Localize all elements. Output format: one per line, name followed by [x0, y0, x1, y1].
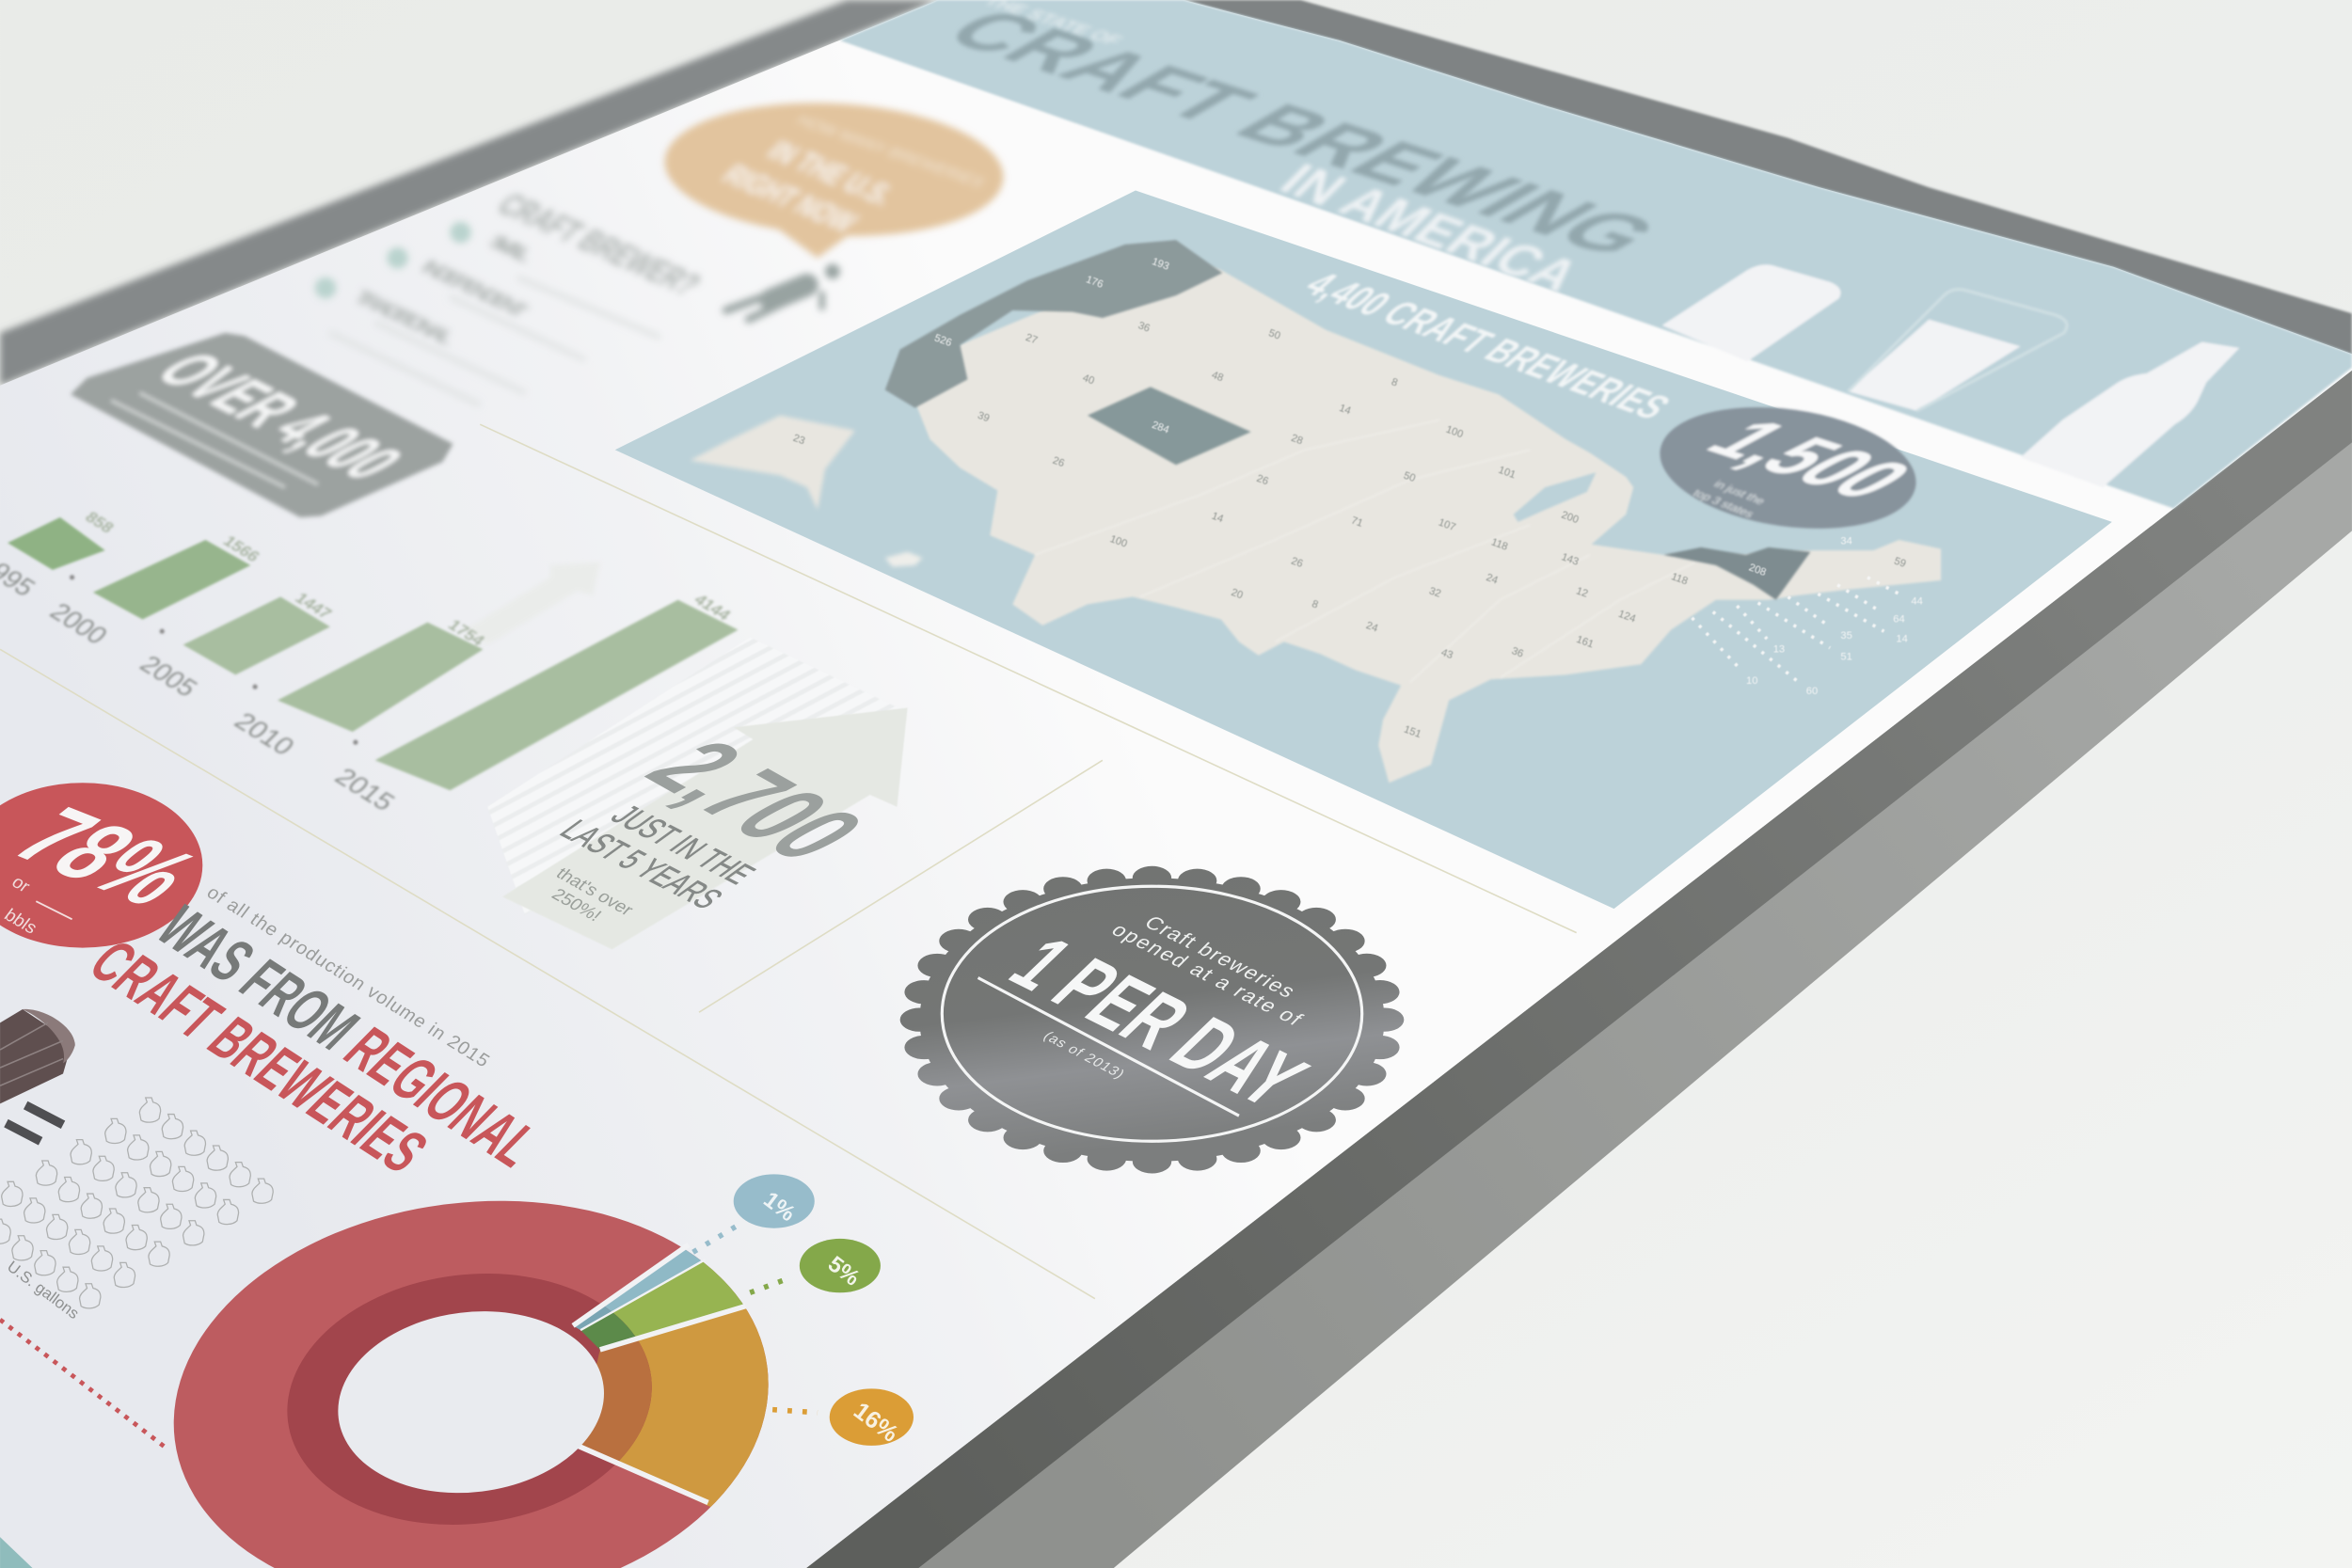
map labels: state brewery counts: 100	[1108, 533, 1129, 550]
callouts: northeast dotted leader lines: 60	[1806, 686, 1818, 697]
callouts: northeast dotted leader lines: 64	[1893, 614, 1905, 626]
callout: 1 percent: 1%	[758, 1187, 800, 1227]
map labels: state brewery counts: 26	[1051, 455, 1066, 469]
map labels: state brewery counts: 28	[1290, 433, 1304, 447]
map labels: state brewery counts: 23	[791, 433, 806, 447]
stat: 2,700: LAST 5 YEARS	[551, 815, 731, 914]
map labels: state brewery counts: 14	[1210, 511, 1225, 525]
callouts: northeast dotted leader lines: 34	[1840, 536, 1852, 547]
map: Great Lakes cutout	[1514, 472, 1596, 522]
callouts: northeast dotted leader lines: 35	[1840, 630, 1852, 641]
callout: 5 percent: 5%	[823, 1251, 865, 1291]
year axis labels: 2015	[328, 763, 401, 816]
text: just in the last 5 years: JUST IN THE	[602, 800, 763, 890]
map: New York highlighted	[1663, 547, 1810, 600]
speech bubble: orange: IN THE U.S.	[760, 135, 903, 211]
map: Colorado highlighted	[1088, 387, 1251, 465]
map labels: state brewery counts: 36	[1136, 320, 1152, 335]
year axis labels: 2010	[228, 707, 300, 761]
text: of all the production volume in 2015: of all the production volume in 2015	[202, 882, 493, 1071]
map labels: state brewery counts: 176	[1085, 274, 1104, 291]
heading: was from regional craft breweries	[75, 894, 553, 1184]
panel: what is a craft brewer	[315, 95, 1007, 404]
speech bubble: orange	[661, 95, 1007, 258]
text: craft breweries opened at a rate of: Craft breweries	[1139, 911, 1300, 1002]
callouts: northeast dotted leader lines: 10	[1746, 675, 1757, 687]
dotted leader: red	[0, 1320, 165, 1447]
header band: teal title block	[840, 0, 2352, 508]
title: craft brewing: CRAFT BREWING	[924, 0, 1680, 266]
map labels: state brewery counts: 200	[1560, 510, 1581, 526]
stat: 2,700	[548, 726, 891, 926]
heading: was from regional craft breweries: WAS FROM REGIONAL	[143, 894, 553, 1179]
callout: 1 percent	[693, 1174, 815, 1252]
footer band: teal corner	[0, 1537, 33, 1568]
icon: person silhouette	[726, 264, 840, 320]
speech bubble: orange: HOW MANY BREWERIES	[792, 112, 990, 190]
map labels: state brewery counts: 20	[1230, 587, 1245, 601]
map labels: state brewery counts: 118	[1489, 536, 1509, 553]
bars	[8, 517, 738, 790]
map labels: state brewery counts: 193	[1151, 256, 1170, 273]
panel: map of breweries	[615, 190, 2112, 909]
bar value labels	[82, 508, 735, 649]
bar value labels: 1566	[219, 532, 264, 565]
badge: 1 per day bottle cap: opened at a rate of	[1106, 919, 1308, 1030]
map labels: state brewery counts: 284	[1151, 420, 1170, 436]
callout: 1,500 circle: in just the	[1711, 478, 1769, 507]
stat: 78 percent red circle: bbls	[0, 906, 40, 938]
checklist: small independent traditional: INDEPENDENT	[417, 257, 533, 321]
bar value labels: 1754	[444, 616, 489, 649]
map labels: state brewery counts: 48	[1210, 370, 1225, 384]
speech bubble: orange: RIGHT NOW	[715, 159, 865, 238]
callout: 16 percent	[772, 1388, 914, 1448]
map labels: state brewery counts: 101	[1497, 465, 1518, 481]
icon: pint glass silhouette	[1662, 264, 1841, 361]
map labels: state brewery counts: 40	[1081, 372, 1096, 387]
map labels: state brewery counts: 161	[1575, 634, 1595, 651]
map labels: state brewery counts: 12	[1575, 585, 1589, 600]
chart: production donut	[173, 1200, 769, 1568]
checklist: small independent traditional: TRADITIONAL	[349, 287, 460, 348]
checklist: small independent traditional: SMALL	[485, 231, 538, 266]
map labels: state brewery counts: 26	[1255, 473, 1270, 487]
map labels: state brewery counts: 14	[1338, 403, 1352, 417]
slice: green	[613, 1262, 743, 1337]
callouts: northeast dotted leader lines: 44	[1911, 596, 1923, 608]
map labels: state brewery counts: 118	[1670, 571, 1690, 587]
stat: 2,700: 2,700	[620, 726, 891, 876]
callout: over 4,000 card: OVER 4,000	[139, 343, 421, 488]
map labels: state brewery counts: 143	[1560, 551, 1581, 568]
map labels: state brewery counts: 50	[1267, 327, 1282, 342]
icon grid: growlers	[0, 1098, 273, 1308]
map labels: state brewery counts: 8	[1390, 376, 1399, 389]
map: state borders	[1035, 420, 1695, 682]
callout: 1,500 circle: top 3 states	[1690, 487, 1757, 520]
map: Hawaii	[885, 552, 923, 567]
callout: 1,500 circle: 1,500	[1685, 409, 1935, 510]
stat: 2,700: 250%!	[548, 885, 605, 926]
text: U.S. gallons: U.S. gallons	[4, 1258, 83, 1323]
callouts: northeast dotted leader lines: 51	[1840, 651, 1852, 662]
map labels: state brewery counts: 39	[976, 410, 991, 424]
checklist: small independent traditional	[315, 222, 660, 404]
text: that's over 250%: that's over	[552, 864, 637, 920]
map labels: state brewery counts: 26	[1290, 555, 1304, 570]
map labels: state brewery counts: 27	[1024, 332, 1039, 346]
map labels: state brewery counts: 24	[1364, 620, 1379, 635]
slice: blue	[605, 1249, 702, 1311]
map: contiguous United States	[915, 255, 1941, 783]
arrow: small growth arrow	[465, 562, 600, 645]
stat: 78 percent red circle: or	[8, 873, 34, 896]
bar chart: craft breweries by year	[0, 508, 738, 816]
year axis labels: 2005	[134, 651, 203, 702]
map labels: state brewery counts: 124	[1617, 609, 1637, 625]
map labels: state brewery counts: 43	[1439, 647, 1454, 661]
icon: barrel	[0, 1009, 75, 1103]
map heading: 4,400 craft breweries: 4,400 CRAFT BREWERIES	[1295, 265, 1680, 426]
callouts: northeast dotted leader lines: 13	[1773, 644, 1785, 656]
map labels: state brewery counts: 100	[1444, 424, 1465, 440]
icon: beer glass with outline	[1848, 290, 2067, 411]
subheading: craft breweries: CRAFT BREWERIES	[75, 928, 442, 1184]
map labels: state brewery counts: 71	[1349, 515, 1364, 530]
bar value labels: 4144	[691, 591, 735, 624]
map labels: state brewery counts: 151	[1403, 724, 1422, 740]
text: 1 per day: 1 PER DAY	[991, 923, 1326, 1123]
bar value labels: 858	[82, 508, 119, 536]
year axis labels	[0, 550, 401, 816]
bar value labels: 1447	[292, 589, 336, 622]
map labels: state brewery counts	[791, 256, 1907, 740]
callout: 5 percent	[750, 1239, 881, 1292]
icon: equals sign	[6, 1105, 63, 1141]
icon: beer bottle	[2021, 342, 2239, 487]
map labels: state brewery counts: 24	[1485, 572, 1500, 587]
map labels: state brewery counts: 36	[1510, 645, 1525, 660]
badge: 1 per day bottle cap	[919, 878, 1385, 1162]
map labels: state brewery counts: 59	[1893, 555, 1907, 570]
callouts: northeast dotted leader lines: 14	[1896, 633, 1908, 644]
heading: craft brewer: CRAFT BREWER?	[489, 187, 708, 302]
map labels: state brewery counts: 50	[1402, 470, 1417, 484]
dividers	[0, 424, 1577, 1299]
arrow: large pale growth arrow	[502, 708, 908, 949]
arrow: 2,700 growth hatch background	[487, 638, 908, 915]
map labels: state brewery counts: 107	[1437, 517, 1457, 533]
subtitle: in america: IN AMERICA	[1268, 155, 1592, 301]
map labels: state brewery counts: 8	[1311, 598, 1320, 611]
text: as of 2013: (as of 2013)	[1040, 1029, 1128, 1082]
callout: over 4,000 card	[71, 333, 453, 517]
map: gray top states on the west coast	[885, 240, 1222, 408]
callouts: northeast dotted leader lines	[1692, 536, 1923, 697]
map: Alaska	[690, 416, 855, 510]
callout: 1,500 circle	[1652, 392, 1935, 544]
callout: 16 percent: 16%	[849, 1398, 903, 1448]
map labels: state brewery counts: 526	[933, 332, 953, 349]
map labels: state brewery counts: 208	[1747, 562, 1768, 578]
map labels: state brewery counts: 32	[1427, 585, 1442, 600]
year axis labels: 2000	[43, 598, 113, 650]
slice: regional orange	[619, 1308, 769, 1507]
